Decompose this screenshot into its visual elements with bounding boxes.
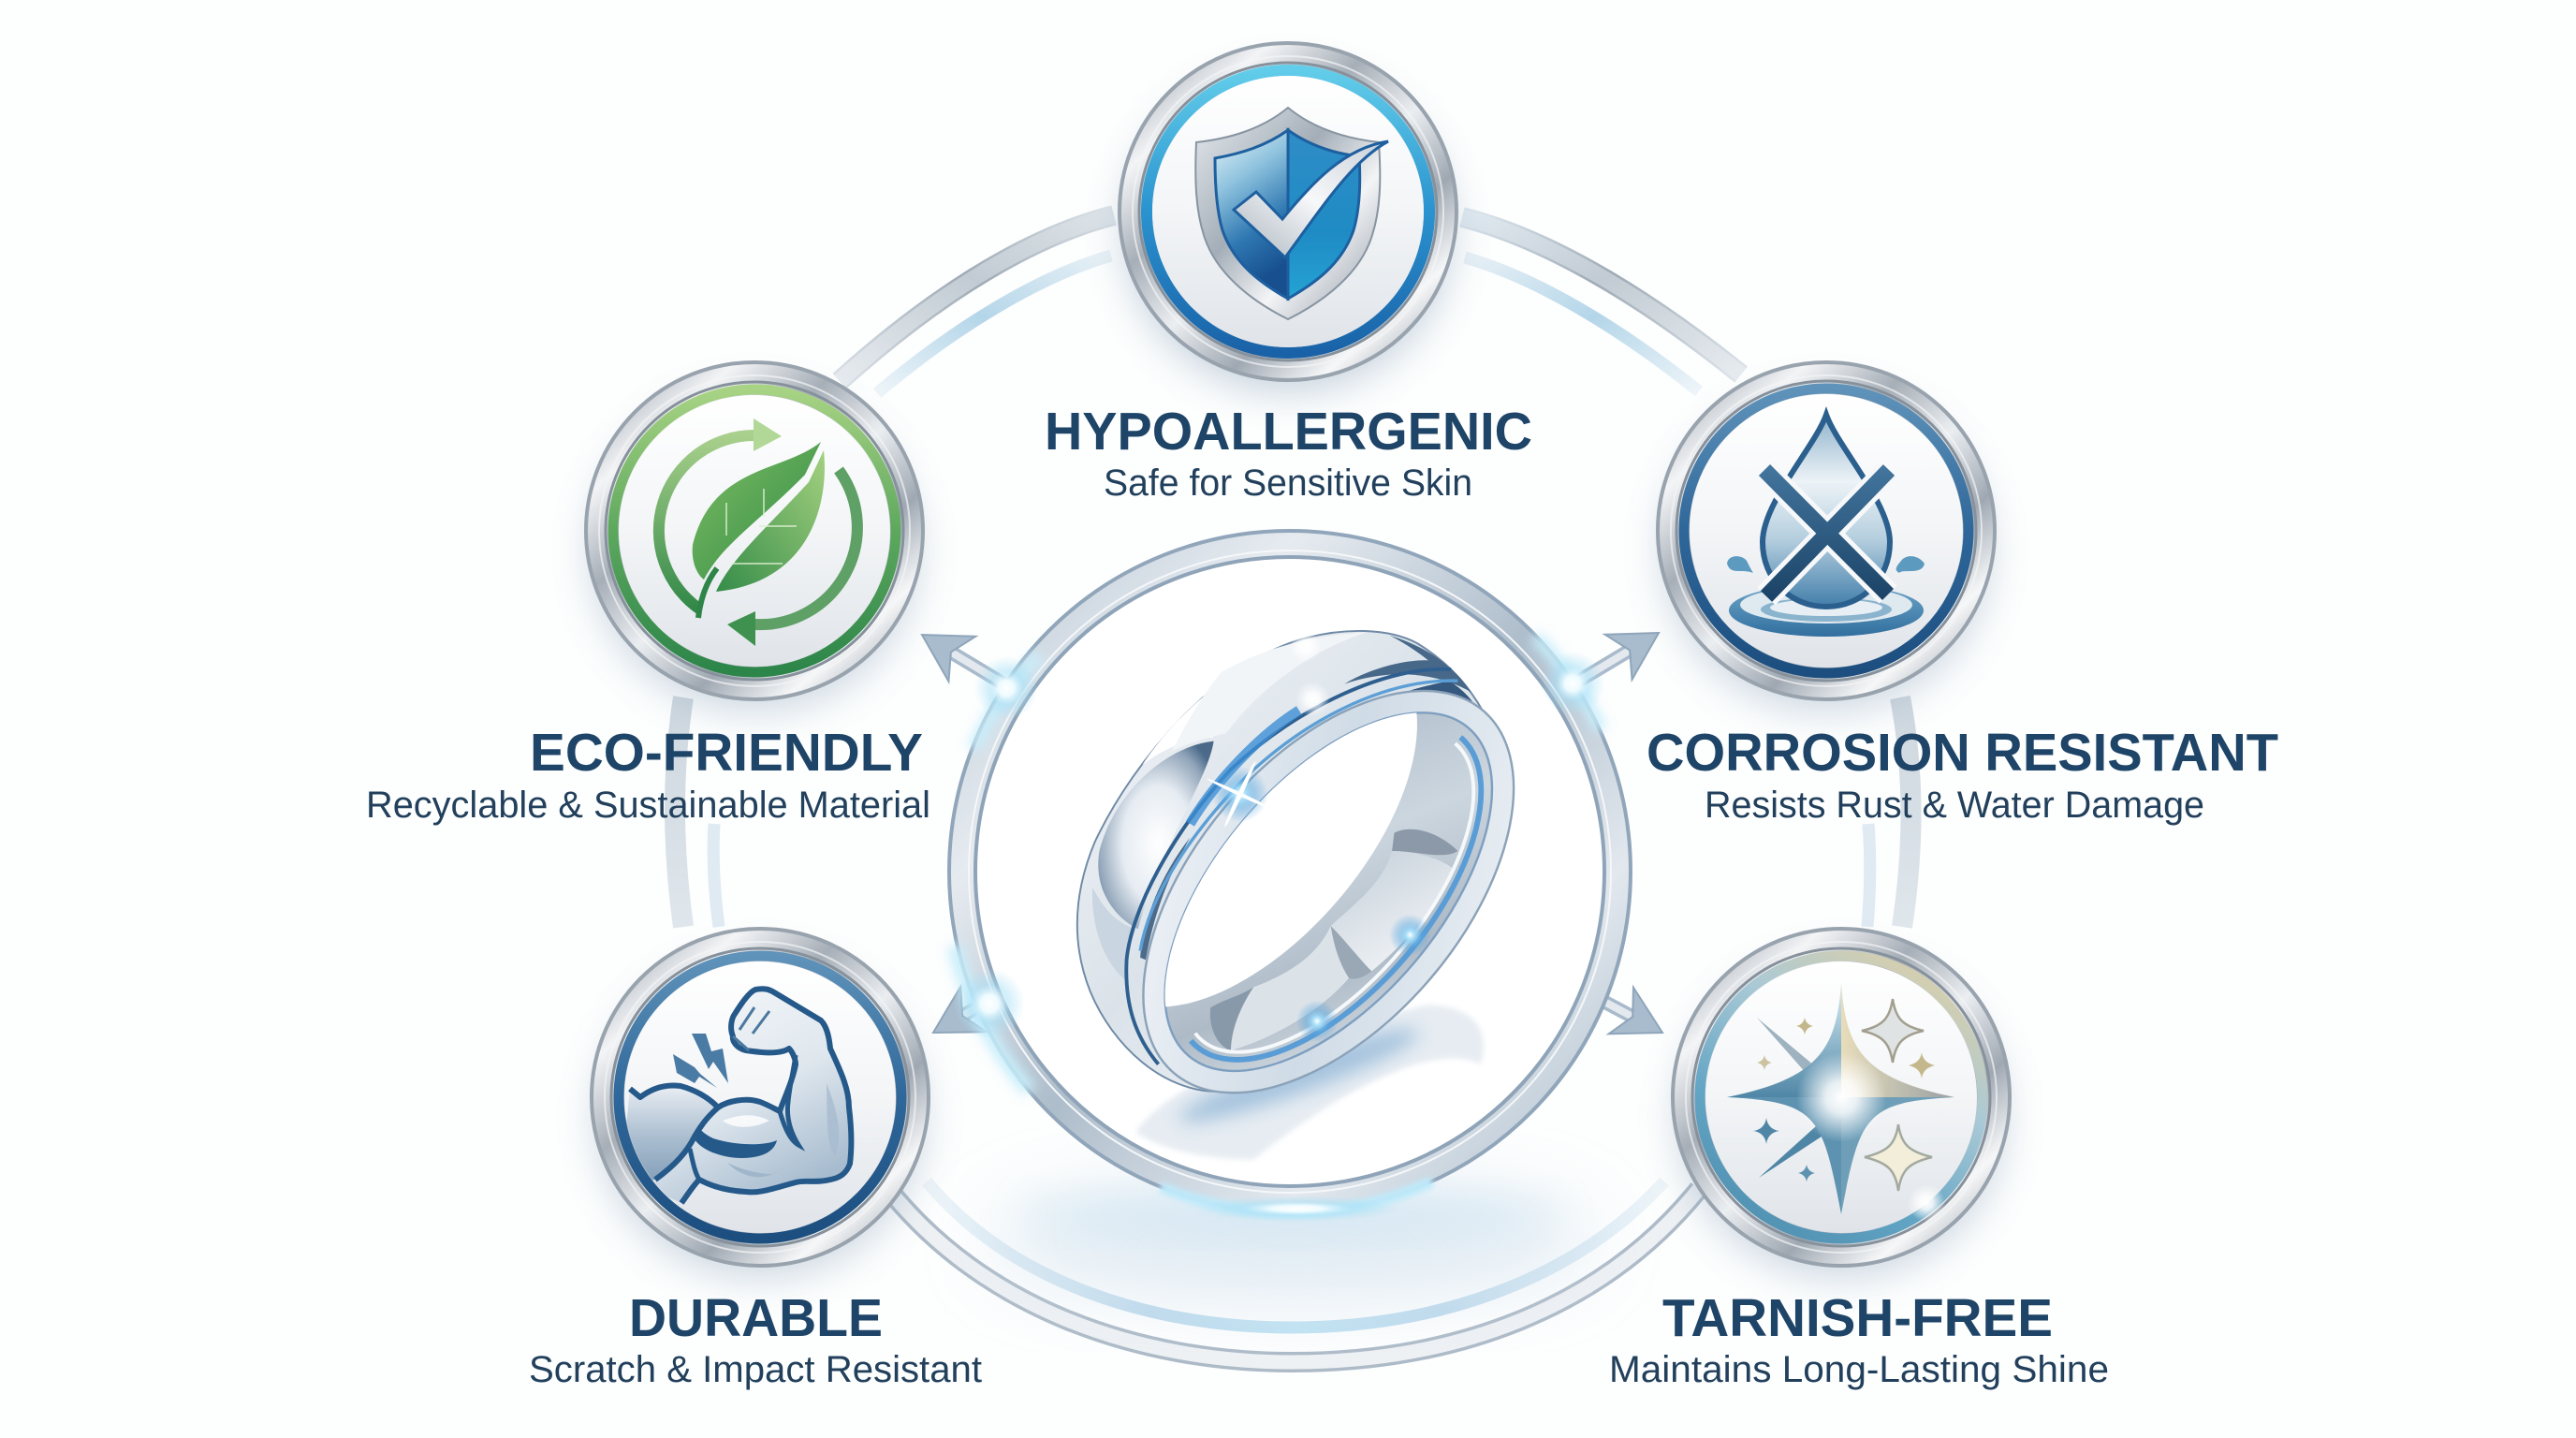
badge: hypoallergenic xyxy=(1120,43,1456,393)
label: corrosion resistant: Resists Rust & Water Damage xyxy=(1705,785,2204,826)
icon: shield with check xyxy=(1195,108,1388,319)
arrow: to eco-friendly xyxy=(909,612,1019,708)
label: tarnish-free: Maintains Long-Lasting Shine xyxy=(1609,1349,2109,1390)
badge: tarnish-free xyxy=(1673,929,2010,1279)
ring reflections xyxy=(1092,632,1483,983)
arrow: to tarnish-free xyxy=(1590,977,1675,1056)
label: eco-friendly: ECO-FRIENDLY xyxy=(530,723,923,783)
ring sparkles xyxy=(1207,631,1431,1042)
label: durable: Scratch & Impact Resistant xyxy=(529,1349,982,1390)
ring front rim xyxy=(1072,624,1585,1160)
outer orbit arcs xyxy=(675,215,1911,1362)
icon: sparkling star xyxy=(1727,983,1954,1222)
label: corrosion resistant xyxy=(1647,723,2278,826)
label: hypoallergenic: HYPOALLERGENIC xyxy=(1045,402,1532,462)
icon: impact bolts xyxy=(673,1034,728,1088)
arrow: to durable xyxy=(920,981,997,1055)
badge: corrosion resistant xyxy=(1658,362,1995,712)
label: hypoallergenic xyxy=(1045,402,1532,504)
label: tarnish-free: TARNISH-FREE xyxy=(1662,1288,2053,1348)
badge: durable xyxy=(592,929,929,1279)
label: tarnish-free xyxy=(1609,1288,2109,1390)
icon: flexed arm xyxy=(620,989,851,1203)
arrows from center to benefits xyxy=(909,610,1675,1056)
haze below center ring xyxy=(992,1184,1591,1297)
icon: leaf with recycling arrows xyxy=(659,418,857,646)
center metal ring xyxy=(949,531,1631,1212)
label: corrosion resistant: CORROSION RESISTANT xyxy=(1647,723,2278,783)
arrow: to corrosion resistant xyxy=(1559,610,1672,708)
badge: eco-friendly xyxy=(586,362,923,712)
ring opening xyxy=(1164,713,1485,1063)
ring light flares xyxy=(954,637,1604,1222)
label: durable: DURABLE xyxy=(629,1288,883,1348)
label: eco-friendly: Recyclable & Sustainable Material xyxy=(366,785,930,826)
ring inner surface xyxy=(1104,655,1553,1128)
ring illustration xyxy=(1076,630,1515,1161)
label: hypoallergenic: Safe for Sensitive Skin xyxy=(1104,462,1472,504)
ring groove xyxy=(1126,669,1457,1064)
icon: water drop crossed out xyxy=(1727,415,1925,637)
ring shadow xyxy=(1135,1005,1484,1160)
infographic xyxy=(369,41,2278,1389)
label: durable xyxy=(529,1288,982,1390)
ring band body xyxy=(1077,631,1507,1092)
label: eco-friendly xyxy=(366,723,930,826)
